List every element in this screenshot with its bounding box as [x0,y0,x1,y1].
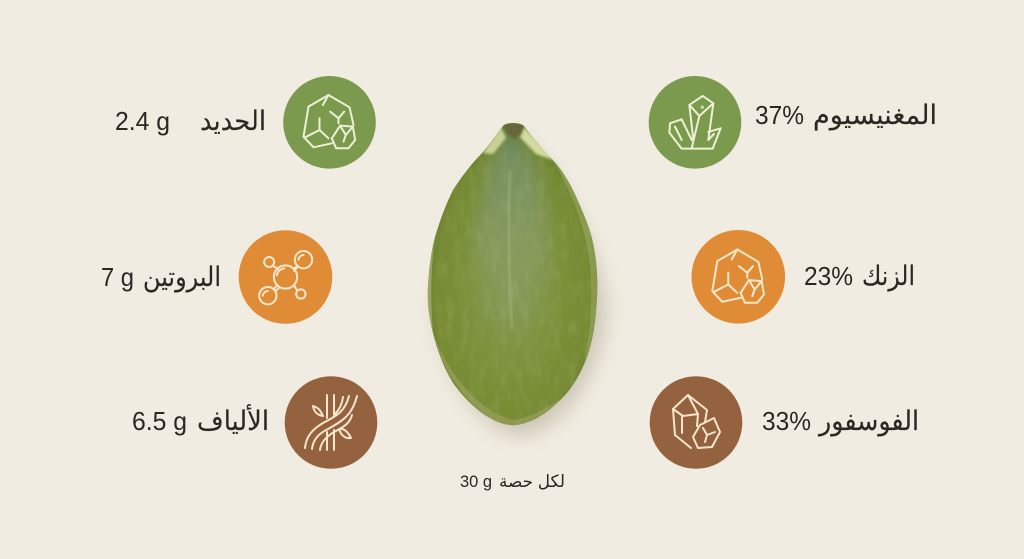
item: iron [115,76,376,169]
icon: zinc rock [692,230,785,324]
item: protein [101,230,332,324]
value: phosphorus percent: 33% [762,406,811,436]
label: protein name: البروتين [143,262,221,293]
item: zinc [692,230,915,324]
value: magnesium percent: 37% [755,100,804,130]
value: fibre amount: 6.5 g [132,406,187,436]
label: fibre name: الألياف [197,403,269,436]
item: fibre [132,376,377,469]
icon: molecule [239,230,332,324]
caption: serving size: 30 g [460,472,492,491]
value: iron amount: 2.4 g [115,106,170,136]
icon: iron rock [283,76,376,169]
pumpkin seed illustration [425,120,605,436]
label: iron name: الحديد [200,106,266,136]
label: zinc name: الزنك [862,261,915,292]
icon: plant fibres [285,376,377,469]
label: phosphorus name: الفوسفور [817,406,919,437]
item: phosphorus [650,376,919,469]
value: zinc percent: 23% [804,261,853,291]
caption: serving size: لكل حصة [499,472,565,491]
icon: crystal cluster [649,76,741,169]
label: magnesium name: المغنيسيوم [813,100,937,131]
caption: serving size [460,472,565,491]
item: magnesium [649,76,937,169]
icon: phosphorus crystal [650,376,742,469]
value: protein amount: 7 g [101,262,134,292]
